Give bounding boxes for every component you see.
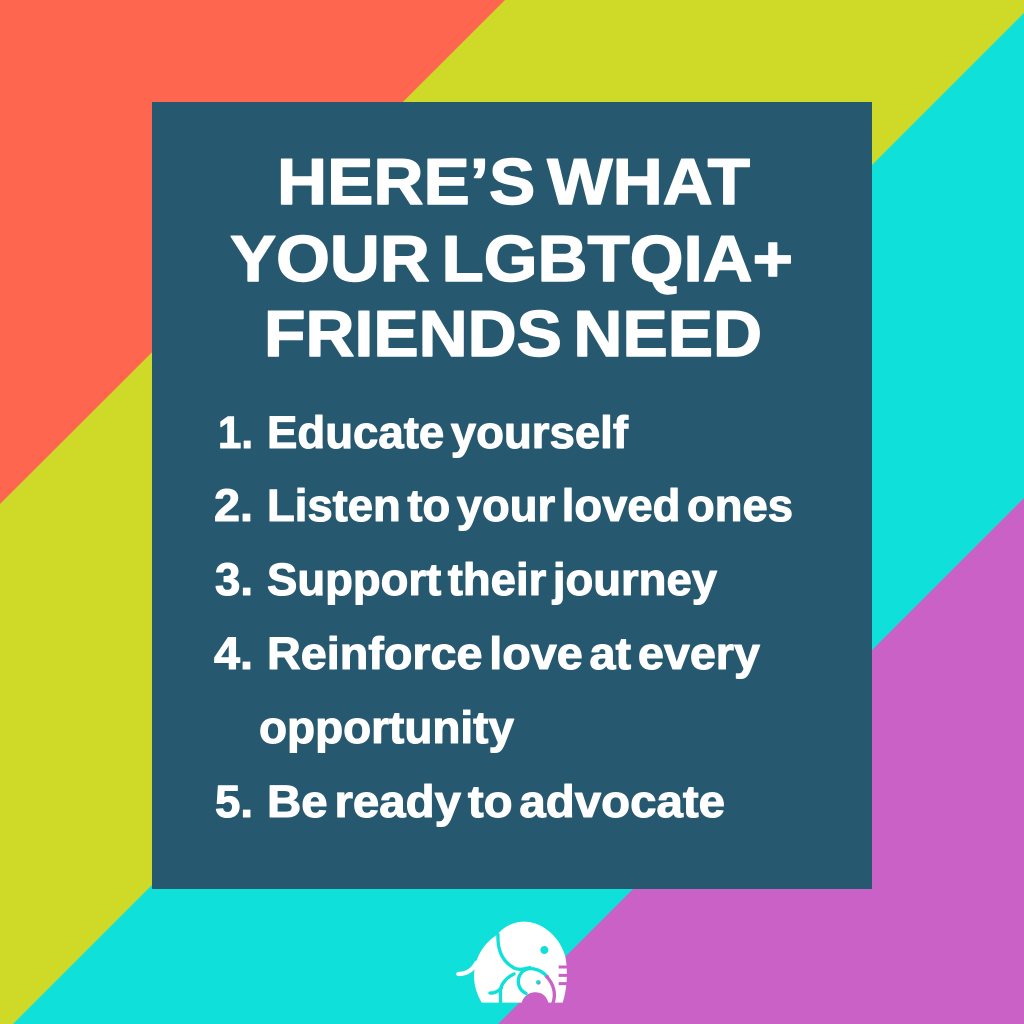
item 3: 3. <box>215 554 253 605</box>
item 5: Be ready to advocate <box>267 776 725 827</box>
background: purple corner <box>498 498 1024 1024</box>
item 2: Listen to your loved ones <box>267 480 793 531</box>
item 4: 4. <box>214 628 253 679</box>
item 4: opportunity <box>259 702 514 753</box>
item 4 <box>214 628 760 753</box>
numbered list <box>214 407 793 827</box>
title line 2: YOUR LGBTQIA+ <box>230 222 793 295</box>
item 2: 2. <box>214 480 253 531</box>
item 1: Educate yourself <box>267 407 629 458</box>
item 1: 1. <box>218 407 253 458</box>
panel: navy content card <box>152 102 872 889</box>
title line 3: FRIENDS NEED <box>264 297 762 370</box>
title line 1: HERE’S WHAT <box>277 145 750 218</box>
item 3: Support their journey <box>267 554 717 605</box>
background: coral corner <box>0 0 505 504</box>
icon: elephant and calf logo <box>456 922 567 1003</box>
title <box>230 145 793 370</box>
item 5: 5. <box>215 776 253 827</box>
item 4: Reinforce love at every <box>267 628 760 679</box>
